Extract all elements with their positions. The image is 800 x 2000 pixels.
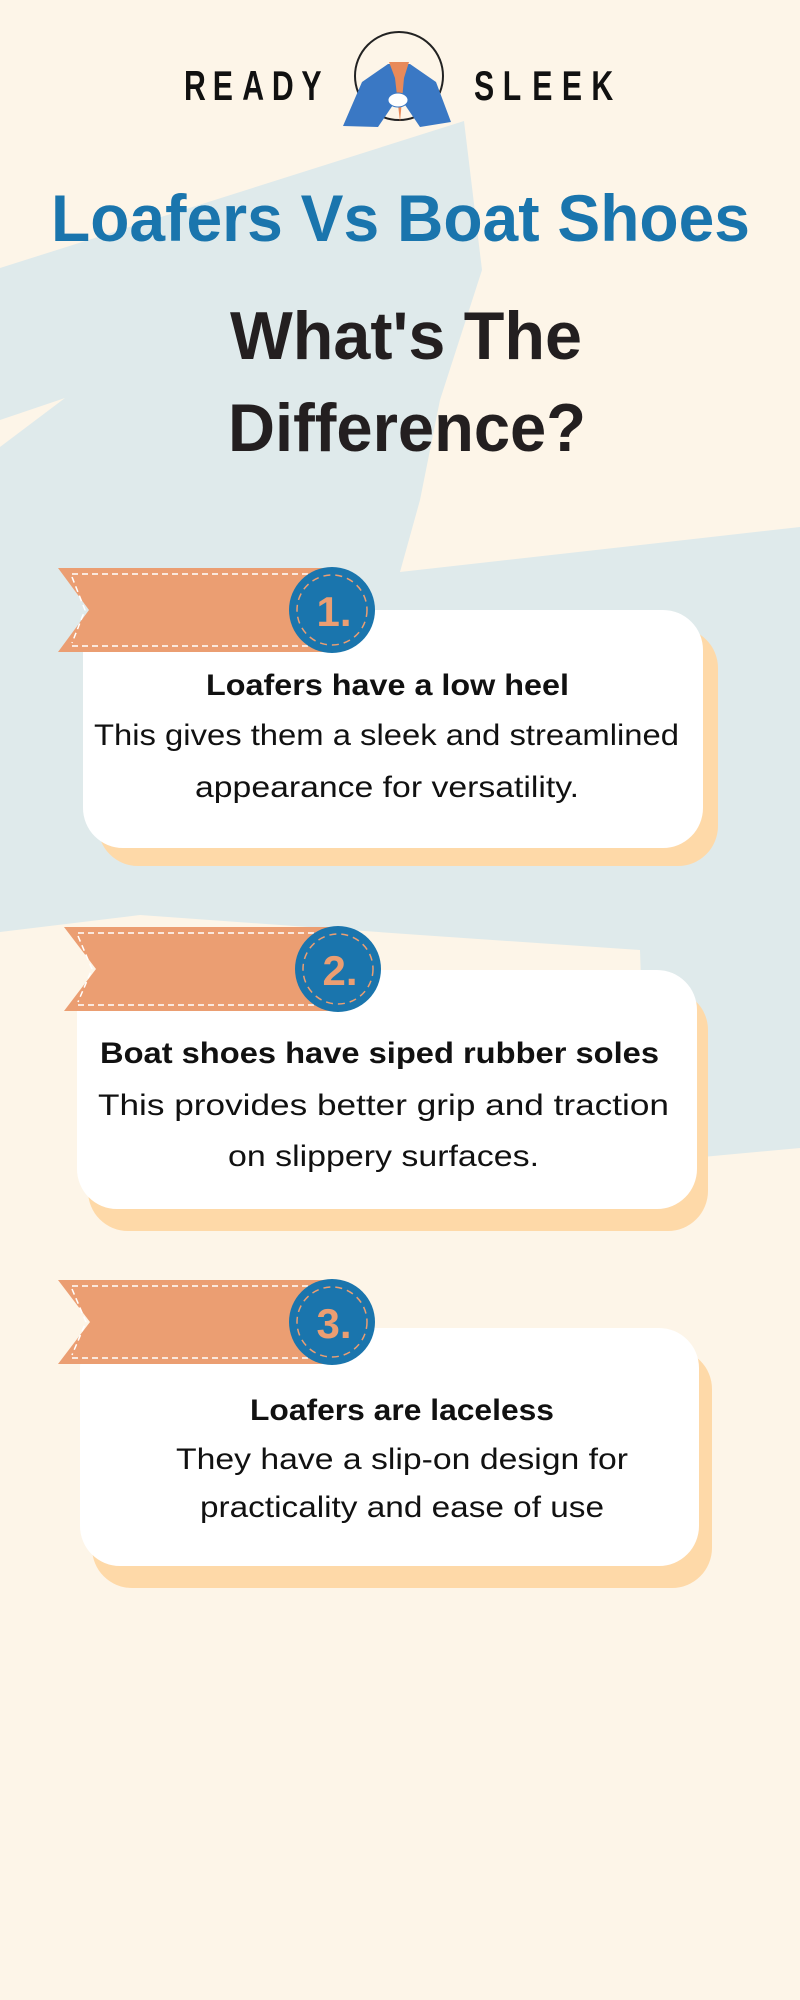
icon: logo man in suit xyxy=(343,32,451,127)
text: point 1: Loafers have a low heel xyxy=(206,669,569,702)
text: point 2: Boat shoes have siped rubber soles xyxy=(100,1037,659,1070)
logo xyxy=(184,32,614,127)
panel: point 3 xyxy=(58,1279,712,1588)
number badge 1: 1. xyxy=(316,588,352,635)
text: point 1: This gives them a sleek and streamlined xyxy=(94,719,679,752)
title: Loafers Vs Boat Shoes xyxy=(51,181,750,255)
brand text: READY: R xyxy=(184,62,206,109)
brand text: SLEEK: L xyxy=(503,62,521,109)
brand text: READY: E xyxy=(213,62,233,109)
brand text: SLEEK: S xyxy=(474,62,494,109)
brand text: SLEEK: E xyxy=(562,62,582,109)
number badge 3 xyxy=(289,1279,375,1365)
brand text: READY: A xyxy=(242,62,264,109)
text: point 2: This provides better grip and traction xyxy=(98,1089,669,1122)
ribbon 1 xyxy=(58,568,332,652)
text: point 3: They have a slip-on design for xyxy=(176,1443,628,1476)
brand text: READY: Y xyxy=(301,62,322,109)
subtitle: What's The xyxy=(230,298,582,374)
ribbon 2 xyxy=(64,927,338,1011)
text: point 3 xyxy=(176,1394,628,1524)
text: point 1 xyxy=(94,669,679,804)
panel: point 2 xyxy=(64,926,708,1231)
subtitle xyxy=(228,298,586,466)
number badge 2: 2. xyxy=(322,947,358,994)
subtitle: Difference? xyxy=(228,390,586,466)
brand text: SLEEK: K xyxy=(591,62,614,109)
text: point 2: on slippery surfaces. xyxy=(228,1140,539,1173)
number badge 2 xyxy=(295,926,381,1012)
text: point 3: Loafers are laceless xyxy=(250,1394,554,1427)
number badge 3: 3. xyxy=(316,1300,352,1347)
text: point 3: practicality and ease of use xyxy=(200,1491,604,1524)
ribbon 3 xyxy=(58,1280,332,1364)
brand text: SLEEK: E xyxy=(532,62,552,109)
number badge 1 xyxy=(289,567,375,653)
brand text: READY xyxy=(184,62,322,109)
brand text: SLEEK xyxy=(474,62,614,109)
text: point 1: appearance for versatility. xyxy=(195,771,579,804)
panel: point 1 xyxy=(58,567,718,866)
text: point 2 xyxy=(98,1037,669,1173)
brand text: READY: D xyxy=(272,62,294,109)
